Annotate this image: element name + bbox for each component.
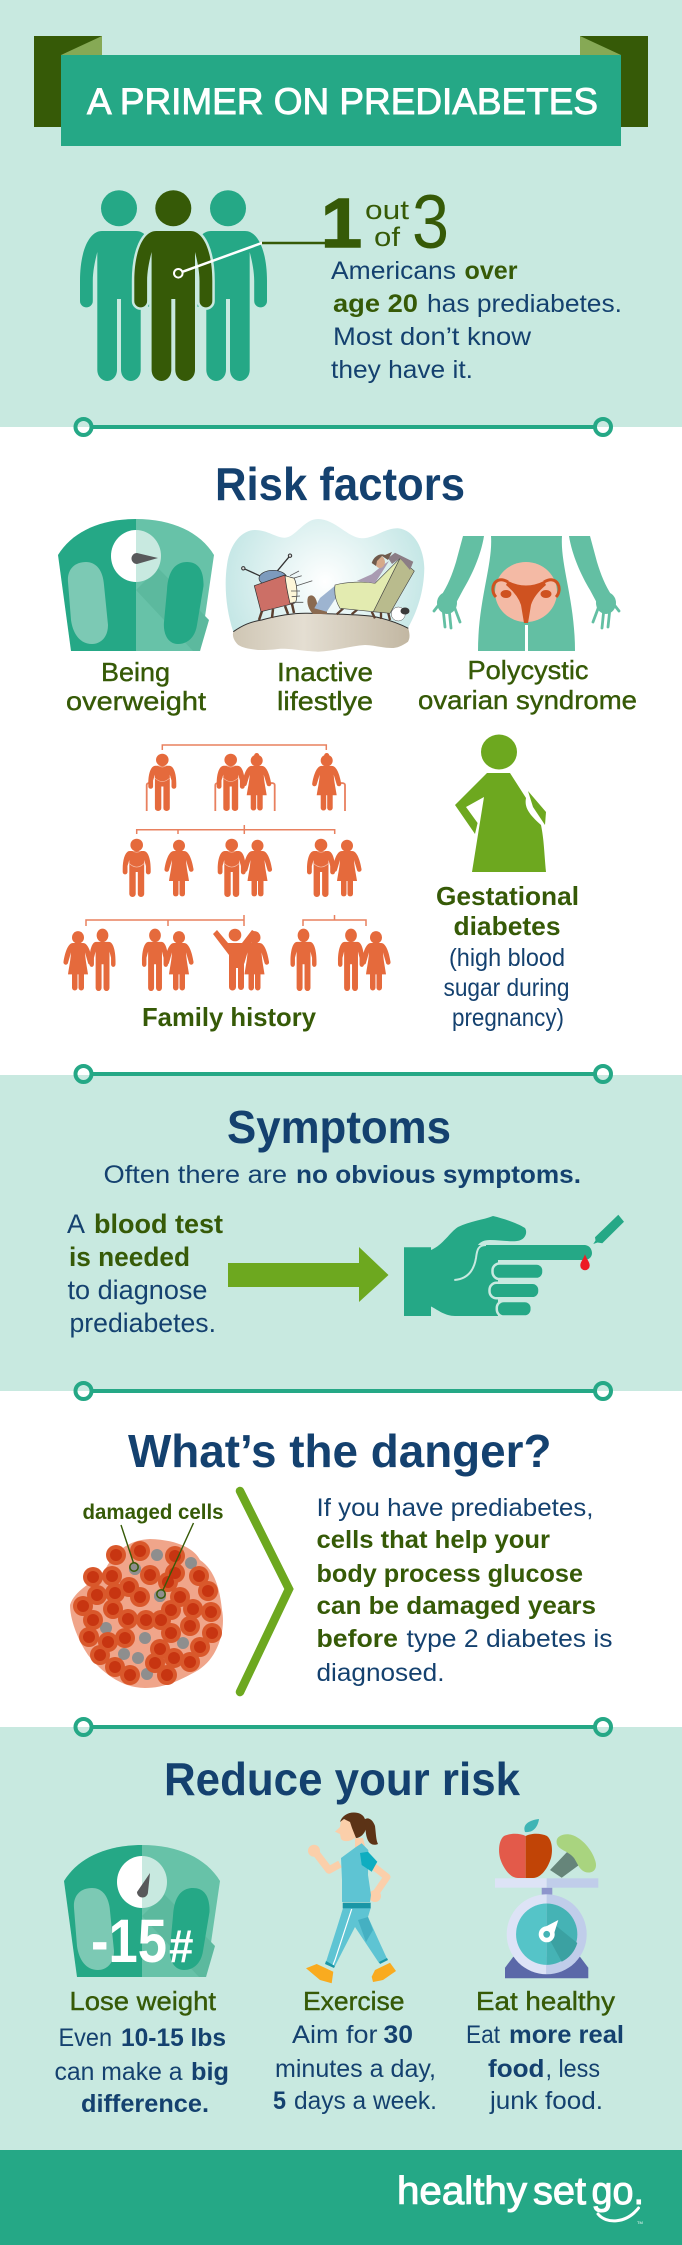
text: lose weight: Even <box>58 2024 112 2052</box>
label: Being overweight <box>66 657 207 716</box>
label: Inactive lifestlye: Inactive <box>277 657 373 687</box>
label: Gestational diabetes: diabetes <box>454 911 560 941</box>
text: lose weight: Lose weight <box>70 1986 217 2016</box>
text: lose weight: big <box>191 2058 229 2086</box>
middle generation <box>123 839 362 897</box>
icon: scale with minus 15 pounds <box>64 1845 220 1977</box>
text: lose weight: 10-15 lbs <box>121 2024 226 2052</box>
text: Americans over age 20: they have it. <box>331 356 473 384</box>
statistic: 1 out of 3: 1 <box>321 184 362 262</box>
logo: healthy set go: set <box>533 2170 586 2213</box>
text: eat healthy: , less <box>546 2055 600 2083</box>
text: eat healthy: Eat <box>466 2021 500 2049</box>
heading: Symptoms: Symptoms <box>227 1101 451 1153</box>
divider <box>76 419 611 435</box>
title banner <box>34 36 648 146</box>
arrow <box>228 1247 388 1302</box>
note: high blood sugar during pregnancy <box>444 944 570 1032</box>
icon: food on a kitchen scale <box>495 1819 598 1978</box>
text: eat healthy <box>466 1986 624 2115</box>
text: Americans over age 20 <box>331 257 622 384</box>
statistic: 1 out of 3: of <box>374 222 401 252</box>
label: damaged cells: damaged cells <box>82 1501 224 1524</box>
icon: torso with uterus and ovaries <box>434 536 619 651</box>
text: eat healthy: food <box>488 2055 544 2083</box>
text: exercise: Exercise <box>303 1986 404 2016</box>
text: prediabetes cell damage: If you have prediabetes, <box>316 1494 594 1522</box>
note: high blood sugar during pregnancy: pregnancy) <box>452 1004 564 1032</box>
text: Americans over age 20: Americans <box>331 257 456 285</box>
chart: family tree <box>63 745 391 991</box>
text: lose weight: difference. <box>81 2090 209 2118</box>
statistic: 1 out of 3 <box>321 180 449 265</box>
note: high blood sugar during pregnancy: (high blood <box>449 944 565 972</box>
text: eat healthy: Eat healthy <box>476 1986 615 2016</box>
text: Americans over age 20: age 20 <box>333 290 418 318</box>
text: a blood test is needed: A <box>67 1209 85 1239</box>
icon: walking woman <box>306 1812 396 1983</box>
text: eat healthy: more real <box>509 2021 624 2049</box>
label: Inactive lifestlye: lifestlye <box>277 686 373 716</box>
logo: healthy set go: TM <box>637 2220 643 2225</box>
text: prediabetes cell damage: type 2 diabetes is <box>406 1625 612 1653</box>
divider <box>76 1383 611 1399</box>
text: prediabetes cell damage: before <box>316 1625 398 1653</box>
heading: Reduce your risk: Reduce your risk <box>164 1753 520 1805</box>
title: A PRIMER ON PREDIABETES <box>87 81 598 122</box>
oldest generation <box>148 753 341 811</box>
text: a blood test is needed: blood test <box>94 1209 223 1239</box>
icon: man watching TV on recliner <box>226 519 424 652</box>
logo: healthy set go: go. <box>592 2170 644 2213</box>
text: prediabetes cell damage: diagnosed. <box>316 1659 444 1687</box>
logo: healthy set go <box>397 2170 644 2225</box>
icon: pregnant woman <box>455 734 546 872</box>
divider <box>76 1066 611 1082</box>
text: Americans over age 20: has prediabetes. <box>427 290 622 318</box>
label: minus 15 pounds: # <box>169 1920 194 1972</box>
text: often no obvious symptoms <box>104 1161 581 1189</box>
text: Americans over age 20: Most don’t know <box>333 323 532 351</box>
text: prediabetes cell damage: cells that help your <box>316 1526 550 1554</box>
youngest generation <box>63 929 391 991</box>
text: exercise: minutes a day, <box>275 2055 436 2083</box>
label: Family history: Family history <box>142 1002 317 1032</box>
label: Inactive lifestlye <box>277 657 373 716</box>
divider <box>76 1719 611 1735</box>
logo: healthy set go: healthy <box>397 2170 528 2213</box>
label: Gestational diabetes <box>436 881 579 1032</box>
text: Americans over age 20: over <box>464 257 518 285</box>
note: high blood sugar during pregnancy: sugar during <box>444 974 570 1002</box>
icon: bathroom scale <box>58 519 214 651</box>
statistic: 1 out of 3: out <box>365 195 410 225</box>
chevron <box>240 1491 289 1692</box>
text: exercise: 30 <box>384 2021 413 2049</box>
label: Polycystic ovarian syndrome: Polycystic <box>468 655 588 685</box>
label: Gestational diabetes: Gestational <box>436 881 579 911</box>
label: Polycystic ovarian syndrome <box>418 655 637 715</box>
text: exercise <box>273 1986 437 2115</box>
icon: three people, one in three highlighted <box>80 190 338 381</box>
icon: blood drop <box>580 1254 590 1270</box>
label: minus 15 pounds: -15 <box>91 1907 167 1975</box>
icon: hand with finger prick <box>404 1215 624 1316</box>
text: lose weight: can make a <box>54 2058 183 2086</box>
text: often no obvious symptoms: no obvious symptoms. <box>296 1161 581 1189</box>
text: prediabetes cell damage: body process glucose <box>316 1560 583 1588</box>
text: a blood test is needed: to diagnose <box>68 1275 208 1305</box>
text: prediabetes cell damage <box>316 1494 612 1687</box>
icon: lancet <box>593 1215 624 1244</box>
label: Being overweight: Being <box>101 657 170 687</box>
icon: pancreas islet with damaged cells <box>70 1523 223 1688</box>
text: lose weight <box>54 1986 229 2118</box>
heading: Risk factors: Risk factors <box>215 458 465 510</box>
text: exercise: Aim for <box>292 2021 378 2049</box>
text: a blood test is needed: is needed <box>69 1242 190 1272</box>
text: exercise: days a week. <box>294 2087 437 2115</box>
text: often no obvious symptoms: Often there are <box>104 1161 287 1189</box>
text: eat healthy: junk food. <box>489 2087 603 2115</box>
text: a blood test is needed: prediabetes. <box>70 1308 216 1338</box>
text: exercise: 5 <box>273 2087 286 2115</box>
text: prediabetes cell damage: can be damaged years <box>316 1592 596 1620</box>
label: Being overweight: overweight <box>66 686 207 716</box>
heading: What's the danger?: What’s the danger? <box>128 1425 552 1477</box>
text: a blood test is needed <box>67 1209 223 1338</box>
label: Polycystic ovarian syndrome: ovarian syndrome <box>418 685 637 715</box>
statistic: 1 out of 3: 3 <box>412 180 449 265</box>
